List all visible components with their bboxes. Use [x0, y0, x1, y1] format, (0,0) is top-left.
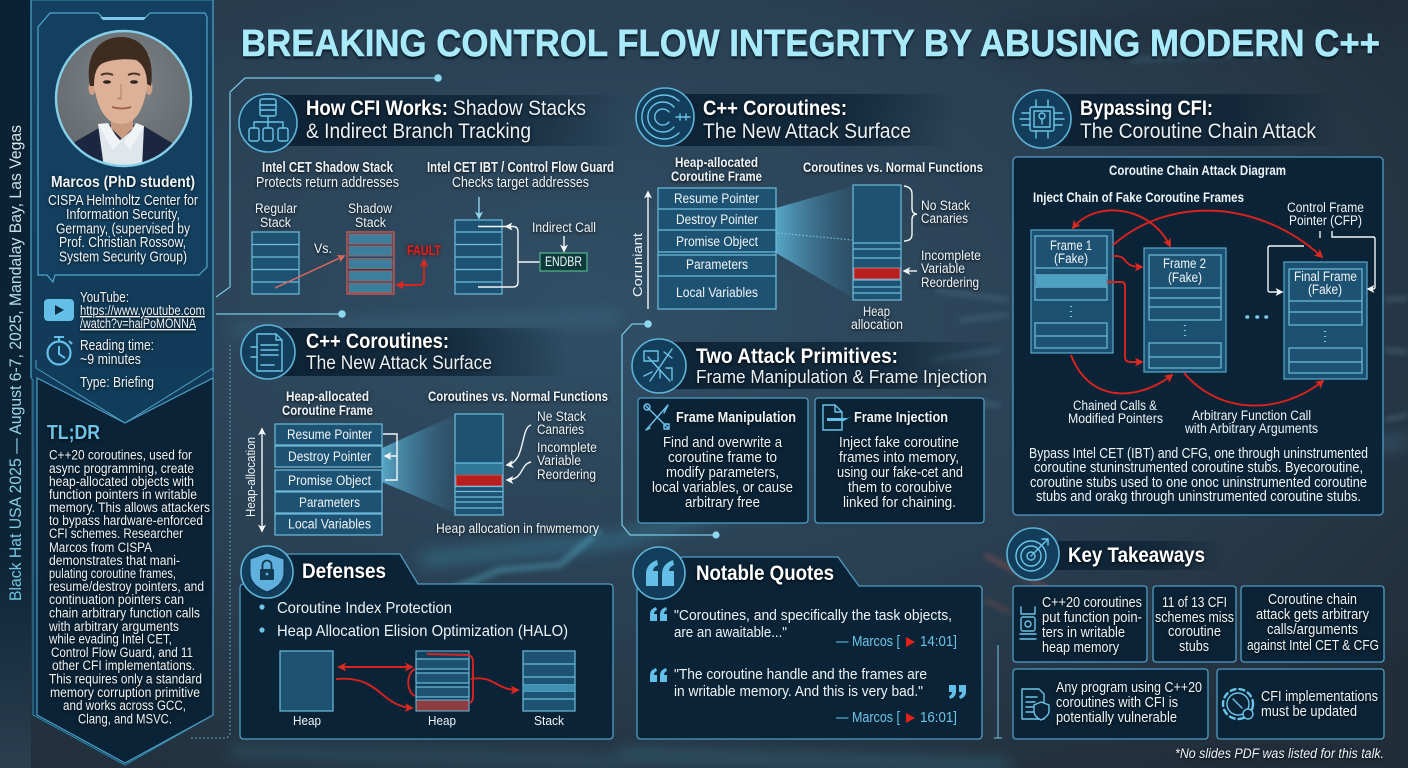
callouts: no canaries and reordering: Ne Stack [537, 409, 586, 424]
card: CFI schemes: schemes miss [1155, 610, 1234, 626]
card: Frame Manipulation: Frame Manipulation [676, 410, 796, 426]
panel: C++ Coroutines (center) [631, 88, 983, 332]
label: arbitrary call: Arbitrary Function Call [1192, 408, 1311, 423]
TL;DR body text: Marcos from CISPA [49, 540, 152, 555]
list: defenses: Heap Allocation Elision Optimization (HALO) [277, 623, 568, 640]
youtube link: https://www.youtube.com [80, 303, 205, 318]
card: must be updated: must be updated [1261, 704, 1357, 720]
shadow stack: Shadow [348, 201, 392, 216]
TL;DR body text: to bypass hardware-enforced [49, 513, 203, 528]
frame 1: (Fake) [1054, 251, 1088, 266]
heading: Notable Quotes: Notable Quotes [696, 562, 834, 585]
speaker name and affiliation [48, 174, 198, 266]
youtube link [80, 290, 205, 331]
card: Frame Manipulation [638, 398, 808, 523]
quote two [650, 667, 966, 726]
panel: Key Takeaways [1007, 528, 1384, 739]
diagram description: coroutine stubs used to one onoc uninstrumented coroutine [1030, 475, 1367, 491]
diagram: heap block: Heap [293, 714, 321, 728]
card: function pointers [1013, 586, 1147, 662]
TL;DR body text: other CFI implementations. [52, 658, 195, 673]
heading: Defenses: Defenses [302, 560, 386, 583]
caption: heap allocation: allocation [851, 317, 903, 332]
TL;DR body text: resume/destroy pointers, and [49, 579, 204, 594]
label: arbitrary call [1184, 408, 1318, 436]
label: control frame pointer [1287, 200, 1364, 228]
label: versus: Vs. [314, 241, 332, 256]
card: function pointers: C++20 coroutines [1042, 595, 1142, 611]
diagram description: stubs and orakg through uninstrumented coroutine stubs. [1036, 489, 1361, 505]
reading time and type: ~9 minutes [80, 352, 141, 368]
heading: Key Takeaways: Key Takeaways [1068, 544, 1205, 567]
speaker name and affiliation: Germany, (supervised by [56, 222, 191, 238]
panel: speaker bio [38, 13, 207, 282]
coroutine frame stack: Resume Pointer [674, 191, 759, 206]
coroutine frame stack: Promise Object [676, 234, 758, 249]
label: arbitrary call: with Arbitrary Arguments [1184, 421, 1318, 436]
speaker name and affiliation: CISPA Helmholtz Center for [48, 193, 198, 209]
label: chained calls [1068, 398, 1163, 426]
TL;DR body text: with arbitrary arguments [48, 619, 179, 634]
card: vulnerable programs [1013, 669, 1208, 739]
callouts: no canaries and reordering: Incomplete [537, 440, 597, 455]
speaker name and affiliation: Information Security, [66, 207, 180, 223]
TL;DR body text: and works across GCC, [63, 698, 186, 713]
coroutine frame stack: Promise Object [288, 473, 371, 488]
shadow stack [347, 201, 394, 294]
heading: Two Attack Primitives: Two Attack Primitives: [696, 345, 898, 368]
brace and callouts: Reordering [921, 275, 979, 290]
panel: How CFI Works [239, 94, 628, 294]
heading: Two Attack Primitives [632, 339, 1004, 393]
panel: Defenses [240, 546, 613, 739]
card: chain attack: calls/arguments [1267, 622, 1358, 638]
panel: C++ Coroutines (left) [241, 325, 608, 536]
arrow: vertical axis [631, 192, 648, 309]
arrow: heap allocation axis: Heap-allocation [244, 437, 258, 517]
card: CFI schemes: coroutine [1168, 624, 1221, 640]
diagram description: coroutine stuninstrumented coroutine stubs. Byecoroutine, [1034, 460, 1363, 476]
callouts: no canaries and reordering: Variable [537, 453, 581, 468]
caption: heap allocation: Heap [863, 304, 890, 319]
card: chain attack [1241, 586, 1384, 662]
footnote: *No slides PDF was listed for this talk. [1175, 746, 1384, 761]
icon: document with shield [1022, 689, 1049, 720]
coroutine frame stack: Coroutine Frame [671, 169, 762, 184]
shadow stack: Stack [355, 215, 386, 230]
label: fault: FAULT [407, 243, 442, 258]
callouts: no canaries and reordering: Reordering [537, 467, 596, 482]
label: chained calls: Modified Pointers [1068, 411, 1163, 426]
reading time and type: Type: Briefing [80, 375, 154, 391]
caption: heap allocation [851, 304, 903, 332]
coroutine frame stack: Parameters [686, 257, 748, 272]
arrow: heap allocation axis [244, 429, 262, 531]
speaker name and affiliation: Marcos (PhD student) [51, 174, 195, 191]
connector lines [190, 74, 1002, 738]
heading: Bypassing CFI [1013, 90, 1342, 148]
diagram description [1029, 446, 1368, 505]
date strip [0, 0, 31, 768]
label: control frame pointer: Control Frame [1287, 200, 1364, 215]
diagram: stack [523, 651, 575, 728]
card: Frame Injection: Frame Injection [854, 410, 948, 426]
frame 2 [1144, 248, 1226, 372]
icon: robot device [1020, 607, 1036, 639]
card: function pointers: ters in writable [1042, 625, 1125, 641]
card: must be updated [1217, 669, 1384, 739]
heading: Two Attack Primitives: Frame Manipulation & Frame Injection [696, 367, 987, 387]
heading: How CFI Works: How CFI Works: [306, 97, 448, 120]
icon: youtube play button [44, 299, 74, 321]
quote one [650, 607, 957, 650]
quote one: — Marcos [ [836, 634, 900, 650]
icon: document [241, 325, 295, 379]
card: Frame Injection [815, 398, 984, 523]
icon: shield with lock [241, 546, 293, 598]
TL;DR body text: function pointers in writable [49, 487, 197, 502]
TL;DR body text: Clang, and MSVC. [78, 712, 172, 726]
coroutine frame stack: Local Variables [288, 516, 371, 532]
list: defenses: Coroutine Index Protection [277, 600, 452, 617]
brace and callouts: Variable [921, 261, 965, 276]
TL;DR heading: TL;DR [47, 422, 100, 444]
cone [776, 186, 853, 298]
card: vulnerable programs: potentially vulnerable [1056, 710, 1177, 726]
TL;DR body text: memory corruption primitive [50, 685, 200, 700]
sub-heading: IBT: Checks target addresses [452, 175, 589, 191]
card: must be updated: CFI implementations [1261, 689, 1378, 705]
speaker name and affiliation: System Security Group) [59, 250, 187, 266]
card: CFI schemes [1153, 586, 1236, 662]
arrows: control frame pointer [1268, 231, 1375, 292]
frame 1: Frame 1 [1050, 238, 1092, 253]
label: chained calls: Chained Calls & [1073, 398, 1157, 413]
heading: C++ Coroutines: C++ Coroutines: [306, 330, 449, 353]
frame 2: Frame 2 [1163, 256, 1206, 271]
card: vulnerable programs: Any program using C++20 [1056, 680, 1202, 696]
speaker photo [56, 31, 191, 170]
reading time and type: Reading time: [80, 338, 154, 354]
quote one: "Coroutines, and specifically the task objects, [674, 608, 952, 624]
arrows: pointer bracket [383, 434, 397, 480]
card: function pointers: put function poin- [1042, 610, 1142, 626]
vertical event text: Black Hat USA 2025 — August 6-7, 2025, Mandalay Bay, Las Vegas [6, 125, 25, 601]
coroutine frame stack: Local Variables [676, 285, 758, 300]
TL;DR body text: demonstrates that mani- [49, 553, 180, 568]
coroutine frame stack: Destroy Pointer [288, 449, 371, 464]
brace and callouts: No Stack [921, 198, 970, 213]
icon: stopwatch [48, 337, 72, 364]
diagram subtitle: Inject Chain of Fake Coroutine Frames [1033, 190, 1244, 205]
TL;DR body text: CFI schemes. Researcher [49, 526, 183, 541]
coroutine frame stack: Destroy Pointer [676, 212, 758, 227]
speaker name and affiliation: Prof. Christian Rossow, [59, 235, 186, 251]
heading: C++ Coroutines [636, 88, 955, 146]
icon: chip with lock [1013, 90, 1071, 148]
icon: quote mark [633, 547, 685, 599]
coroutine frame stack [275, 389, 382, 535]
card: chain attack: against Intel CET & CFG [1247, 638, 1379, 654]
label: control frame pointer: Pointer (CFP) [1289, 213, 1362, 228]
regular stack [252, 201, 299, 294]
heading: Bypassing CFI: Bypassing CFI: [1080, 97, 1213, 120]
cone [382, 415, 455, 513]
card: chain attack: attack gets arbitrary [1256, 607, 1370, 623]
card: Frame Injection: them to coroubive [848, 480, 952, 496]
ENDBR box [540, 253, 587, 271]
ellipsis dots [1247, 315, 1266, 319]
brace and callouts [904, 186, 981, 290]
icon: wrench and screwdriver [644, 404, 669, 430]
quote one: 14:01] [920, 634, 957, 650]
coroutine frame stack: Heap-allocated [675, 155, 758, 170]
TL;DR body text: while evading Intel CET, [48, 632, 172, 646]
card: function pointers: heap memory [1042, 640, 1120, 656]
callouts: no canaries and reordering [507, 409, 597, 482]
arrows: indirect call bracket [478, 226, 540, 287]
icon: attack tools [632, 339, 686, 393]
diagram: heap frames [416, 651, 469, 728]
panel: TL;DR [37, 378, 213, 763]
arrows: defenses flow [336, 654, 518, 708]
sub-heading: shadow stack [256, 160, 399, 191]
final frame: Final Frame [1294, 269, 1357, 284]
sub-heading: shadow stack: Protects return addresses [256, 175, 399, 191]
icon: data hierarchy [239, 94, 297, 152]
card: Frame Injection: frames into memory, [839, 450, 959, 466]
youtube link: /watch?v=haiPoMONNA [80, 316, 196, 331]
callouts: no canaries and reordering: Canaries [537, 422, 584, 437]
heading: C++ Coroutines [241, 325, 568, 379]
arrows: red attack chain [1071, 210, 1323, 406]
caption: heap allocation: Heap allocation in fnwmemory [436, 521, 599, 536]
brace and callouts: Incomplete [921, 248, 981, 263]
left sidebar [31, 0, 213, 765]
card: Frame Manipulation: Find and overwrite a [663, 435, 783, 451]
regular stack: Stack [260, 215, 291, 230]
frame 1 [1031, 230, 1113, 353]
stack column comparison: Coroutines vs. Normal Functions [803, 160, 983, 175]
reading time and type [80, 338, 154, 391]
quote two: — Marcos [ [836, 710, 900, 726]
TL;DR body text: pulating coroutine frames, [49, 566, 176, 581]
diagram title: Coroutine Chain Attack Diagram [1109, 163, 1286, 178]
card: Frame Manipulation: local variables, or cause [652, 480, 793, 496]
quote two: 16:01] [920, 710, 957, 726]
card: Frame Manipulation: arbitrary free [685, 495, 760, 511]
diagram: heap block [280, 651, 333, 728]
ENDBR box: ENDBR [545, 254, 582, 269]
stack column comparison: Coroutines vs. Normal Functions [428, 389, 608, 404]
quote two: in writable memory. And this is very bad." [674, 684, 923, 700]
coroutine frame stack: Resume Pointer [287, 427, 372, 442]
TL;DR body text [48, 448, 210, 726]
panel: Bypassing CFI [1013, 90, 1383, 515]
icon: target [1007, 528, 1059, 580]
TL;DR body text: C++20 coroutines, used for [49, 448, 192, 463]
card: CFI schemes: stubs [1179, 639, 1209, 655]
heading: C++ Coroutines: The New Attack Surface [703, 120, 911, 143]
card: Frame Manipulation: coroutine frame to [668, 450, 777, 466]
list: defenses [259, 600, 568, 640]
brace and callouts: Canaries [921, 211, 968, 226]
panel: Two Attack Primitives [632, 339, 1004, 523]
icon: C++ logo [636, 88, 694, 146]
TL;DR body text: This requires only a standard [49, 672, 202, 686]
heading: C++ Coroutines: The New Attack Surface [306, 353, 492, 374]
regular stack: Regular [255, 201, 297, 216]
card: Frame Injection: Inject fake coroutine [839, 435, 959, 451]
TL;DR body text: async programming, create [49, 461, 194, 476]
heading: How CFI Works [239, 94, 628, 152]
heading: How CFI Works: & Indirect Branch Tracking [306, 120, 531, 143]
final frame: (Fake) [1308, 282, 1342, 297]
diagram: heap frames: Heap [428, 714, 456, 728]
icon: document with injector [823, 405, 852, 430]
arrow: vertical axis: Coruniant [631, 232, 645, 297]
arrow: fault [397, 260, 424, 285]
diagram: stack: Stack [534, 714, 565, 728]
TL;DR body text: continuation pointers can [49, 592, 184, 607]
frame 2: (Fake) [1168, 270, 1202, 285]
card: Frame Injection: using our fake-cet and [837, 465, 963, 481]
quote one: are an awaitable..." [674, 625, 787, 641]
final frame [1284, 262, 1367, 379]
heading: Bypassing CFI: The Coroutine Chain Attack [1080, 120, 1316, 143]
coroutine frame stack: Parameters [299, 495, 360, 510]
card: chain attack: Coroutine chain [1268, 592, 1357, 608]
TL;DR body text: heap-allocated objects with [49, 474, 194, 489]
coroutine frame stack [658, 155, 776, 309]
TL;DR body text: chain arbitrary function calls [49, 606, 200, 620]
sub-heading: IBT [427, 160, 614, 191]
heading: How CFI Works: Shadow Stacks [453, 97, 586, 120]
arrow: indirect call [563, 236, 565, 251]
card: Frame Manipulation: modify parameters, [666, 465, 779, 481]
heading: C++ Coroutines: C++ Coroutines: [703, 97, 847, 120]
card: vulnerable programs: coroutines with CFI is [1056, 695, 1178, 711]
card: Frame Injection: linked for chaining. [843, 495, 956, 511]
attack diagram card [1013, 157, 1383, 515]
youtube link: YouTube: [80, 290, 129, 306]
TL;DR body text: memory. This allows attackers [49, 500, 210, 515]
sub-heading: shadow stack: Intel CET Shadow Stack [262, 160, 394, 176]
coroutine frame stack: Heap-allocated [286, 389, 369, 404]
panel: Notable Quotes [633, 547, 982, 739]
stack column comparison [428, 389, 608, 515]
stack column comparison [803, 160, 983, 300]
heading: Key Takeaways [1007, 528, 1223, 580]
quote two: "The coroutine handle and the frames are [674, 667, 927, 683]
IBT stack [455, 197, 502, 294]
coroutine frame stack: Coroutine Frame [282, 403, 373, 418]
arrow: stack to shadow stack [275, 256, 344, 288]
icon: gear with wrench [1223, 689, 1253, 719]
card: CFI schemes: 11 of 13 CFI [1162, 595, 1227, 611]
indirect call label: Indirect Call [532, 220, 596, 235]
TL;DR body text: Control Flow Guard, and 11 [51, 645, 193, 660]
sub-heading: IBT: Intel CET IBT / Control Flow Guard [427, 160, 614, 176]
